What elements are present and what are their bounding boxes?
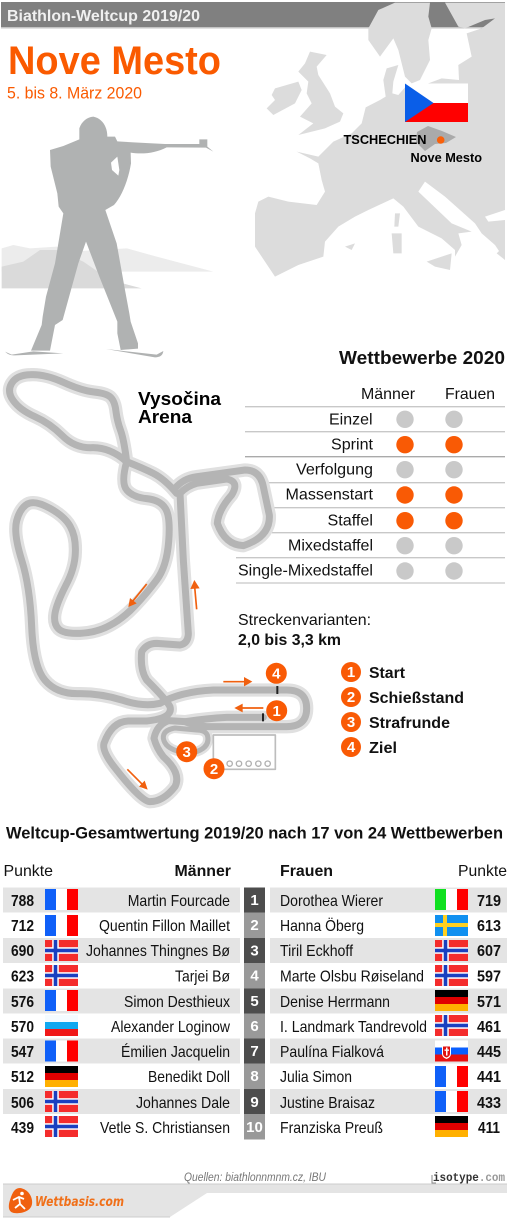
competitions table: Frauen xyxy=(445,386,495,403)
men's standings: Johannes Dale xyxy=(136,1095,230,1112)
logo: Wettbasis xyxy=(9,1188,124,1213)
landscape hills xyxy=(2,245,213,288)
location dot xyxy=(437,136,445,144)
title: Nove Mesto xyxy=(8,39,221,83)
table lines xyxy=(236,407,505,583)
heading: Wettbewerbe 2020: Wettbewerbe 2020 xyxy=(339,348,505,368)
men's standings: 788 xyxy=(11,893,34,910)
header bar xyxy=(1,2,505,28)
women's standings: 411 xyxy=(478,1120,500,1137)
isotype credit: isotype.com xyxy=(433,1171,505,1185)
women's standings: 445 xyxy=(477,1044,501,1061)
women's standings: Hanna Öberg xyxy=(280,917,364,935)
women's standings: Marte Olsbu Røiseland xyxy=(280,968,424,986)
logo: Wettbasis: Wettbasis.com xyxy=(35,1195,124,1210)
women's standings: Franziska Preuß xyxy=(280,1120,383,1137)
label: Nove Mesto: Nove Mesto xyxy=(410,150,482,165)
competitions table: Verfolgung xyxy=(296,462,373,478)
track map xyxy=(10,375,307,802)
standings column headers: Männer xyxy=(174,863,231,880)
women's standings: 461 xyxy=(477,1019,501,1036)
rank column: 8 xyxy=(250,1068,259,1085)
rank column: 3 xyxy=(250,942,259,960)
track markers: 3 xyxy=(183,744,191,761)
rank column: 10 xyxy=(246,1119,263,1136)
competitions table: Staffel xyxy=(328,512,373,530)
competitions table: Sprint xyxy=(331,436,374,454)
women's standings: 441 xyxy=(477,1069,501,1086)
track markers: 2 xyxy=(210,761,218,778)
men's standings: 570 xyxy=(11,1019,34,1036)
men's standings: Tarjei Bø xyxy=(175,968,230,986)
women's standings: I. Landmark Tandrevold xyxy=(280,1019,427,1036)
rank column: 7 xyxy=(250,1043,259,1060)
track legend: 1 xyxy=(347,664,355,681)
women's standings: 607 xyxy=(477,943,501,960)
men's standings: Martin Fourcade xyxy=(128,893,230,910)
women's standings: Justine Braisaz xyxy=(280,1095,375,1112)
track length note xyxy=(238,612,371,649)
row stripes xyxy=(3,888,507,1114)
track legend: Schießstand xyxy=(369,690,464,707)
standings column headers xyxy=(4,863,507,880)
flag of Czech Republic xyxy=(405,84,468,122)
track markers: 4 xyxy=(272,666,281,682)
track legend: Start xyxy=(369,665,406,682)
track legend: Ziel xyxy=(369,740,397,757)
men's standings: 506 xyxy=(11,1095,34,1112)
women's standings: Paulína Fialková xyxy=(280,1044,384,1061)
track length note: 2,0 bis 3,3 km xyxy=(238,632,341,649)
men's standings: 439 xyxy=(11,1120,34,1137)
track markers xyxy=(176,663,287,779)
track legend: 3 xyxy=(347,714,355,731)
shooting range xyxy=(213,735,275,769)
men's standings: Benedikt Doll xyxy=(148,1069,230,1086)
rank column: 1 xyxy=(250,892,259,909)
standings heading: Weltcup-Gesamtwertung 2019/20 nach 17 von 24 Wettbewerben xyxy=(6,824,503,842)
men's standings xyxy=(11,889,230,1137)
arena name: Arena xyxy=(138,407,193,427)
track length note: Streckenvarianten: xyxy=(238,612,371,629)
rank column: 5 xyxy=(250,993,259,1010)
women's standings: Dorothea Wierer xyxy=(280,893,384,910)
men's standings: 690 xyxy=(11,943,34,960)
women's standings: Tiril Eckhoff xyxy=(280,943,353,960)
men's standings: 547 xyxy=(11,1044,34,1061)
men's standings: Vetle S. Christiansen xyxy=(100,1120,230,1137)
men's standings: Quentin Fillon Maillet xyxy=(99,918,230,935)
women's standings: Denise Herrmann xyxy=(280,994,390,1011)
competitions table: Männer xyxy=(361,386,416,403)
rank column: 6 xyxy=(250,1018,259,1035)
standings column headers: Punkte xyxy=(4,863,53,880)
competitions table: Massenstart xyxy=(286,486,374,504)
women's standings xyxy=(280,889,501,1137)
track legend: 2 xyxy=(347,689,355,706)
competitions table: Single-Mixedstaffel xyxy=(238,562,373,580)
standings column headers: Punkte xyxy=(458,863,507,880)
women's standings: Julia Simon xyxy=(280,1069,352,1086)
men's standings: Alexander Loginow xyxy=(111,1019,230,1036)
men's standings: Émilien Jacquelin xyxy=(121,1042,230,1061)
footer band xyxy=(3,1184,507,1217)
track legend xyxy=(341,662,464,757)
men's standings: 623 xyxy=(11,968,34,986)
men's standings: 512 xyxy=(11,1069,34,1086)
map of Europe xyxy=(255,3,505,277)
track legend: Strafrunde xyxy=(369,715,450,732)
track legend: 4 xyxy=(347,739,356,756)
rank column: 4 xyxy=(250,968,259,984)
women's standings: 613 xyxy=(477,918,501,935)
rank column: 2 xyxy=(250,917,259,934)
women's standings: 571 xyxy=(477,994,501,1011)
Czech Republic shape xyxy=(416,126,456,151)
biathlete silhouette xyxy=(5,117,213,357)
competitions table xyxy=(238,386,495,580)
sources: Quellen: biathlonnmnm.cz, IBU xyxy=(184,1170,326,1184)
men's standings: Simon Desthieux xyxy=(124,994,230,1011)
women's standings: 719 xyxy=(477,893,501,910)
rank column: 9 xyxy=(250,1094,259,1111)
label: Tschechien: TSCHECHIEN xyxy=(344,132,426,147)
header bar: Biathlon-Weltcup 2019/20 xyxy=(7,8,200,25)
arena name: Vysočina xyxy=(138,389,222,409)
men's standings: 576 xyxy=(11,994,34,1011)
start and finish ticks xyxy=(263,686,277,721)
track markers: 1 xyxy=(273,703,281,720)
date: 5. bis 8. März 2020 xyxy=(7,84,142,102)
standings column headers: Frauen xyxy=(280,863,333,880)
direction arrows xyxy=(127,580,263,790)
competitions table: Mixedstaffel xyxy=(288,538,373,554)
women's standings: 597 xyxy=(477,968,501,986)
women's standings: 433 xyxy=(477,1095,501,1112)
men's standings: 712 xyxy=(11,918,34,935)
rank column xyxy=(244,888,265,1140)
competitions table: Einzel xyxy=(329,412,372,428)
men's standings: Johannes Thingnes Bø xyxy=(86,943,230,960)
